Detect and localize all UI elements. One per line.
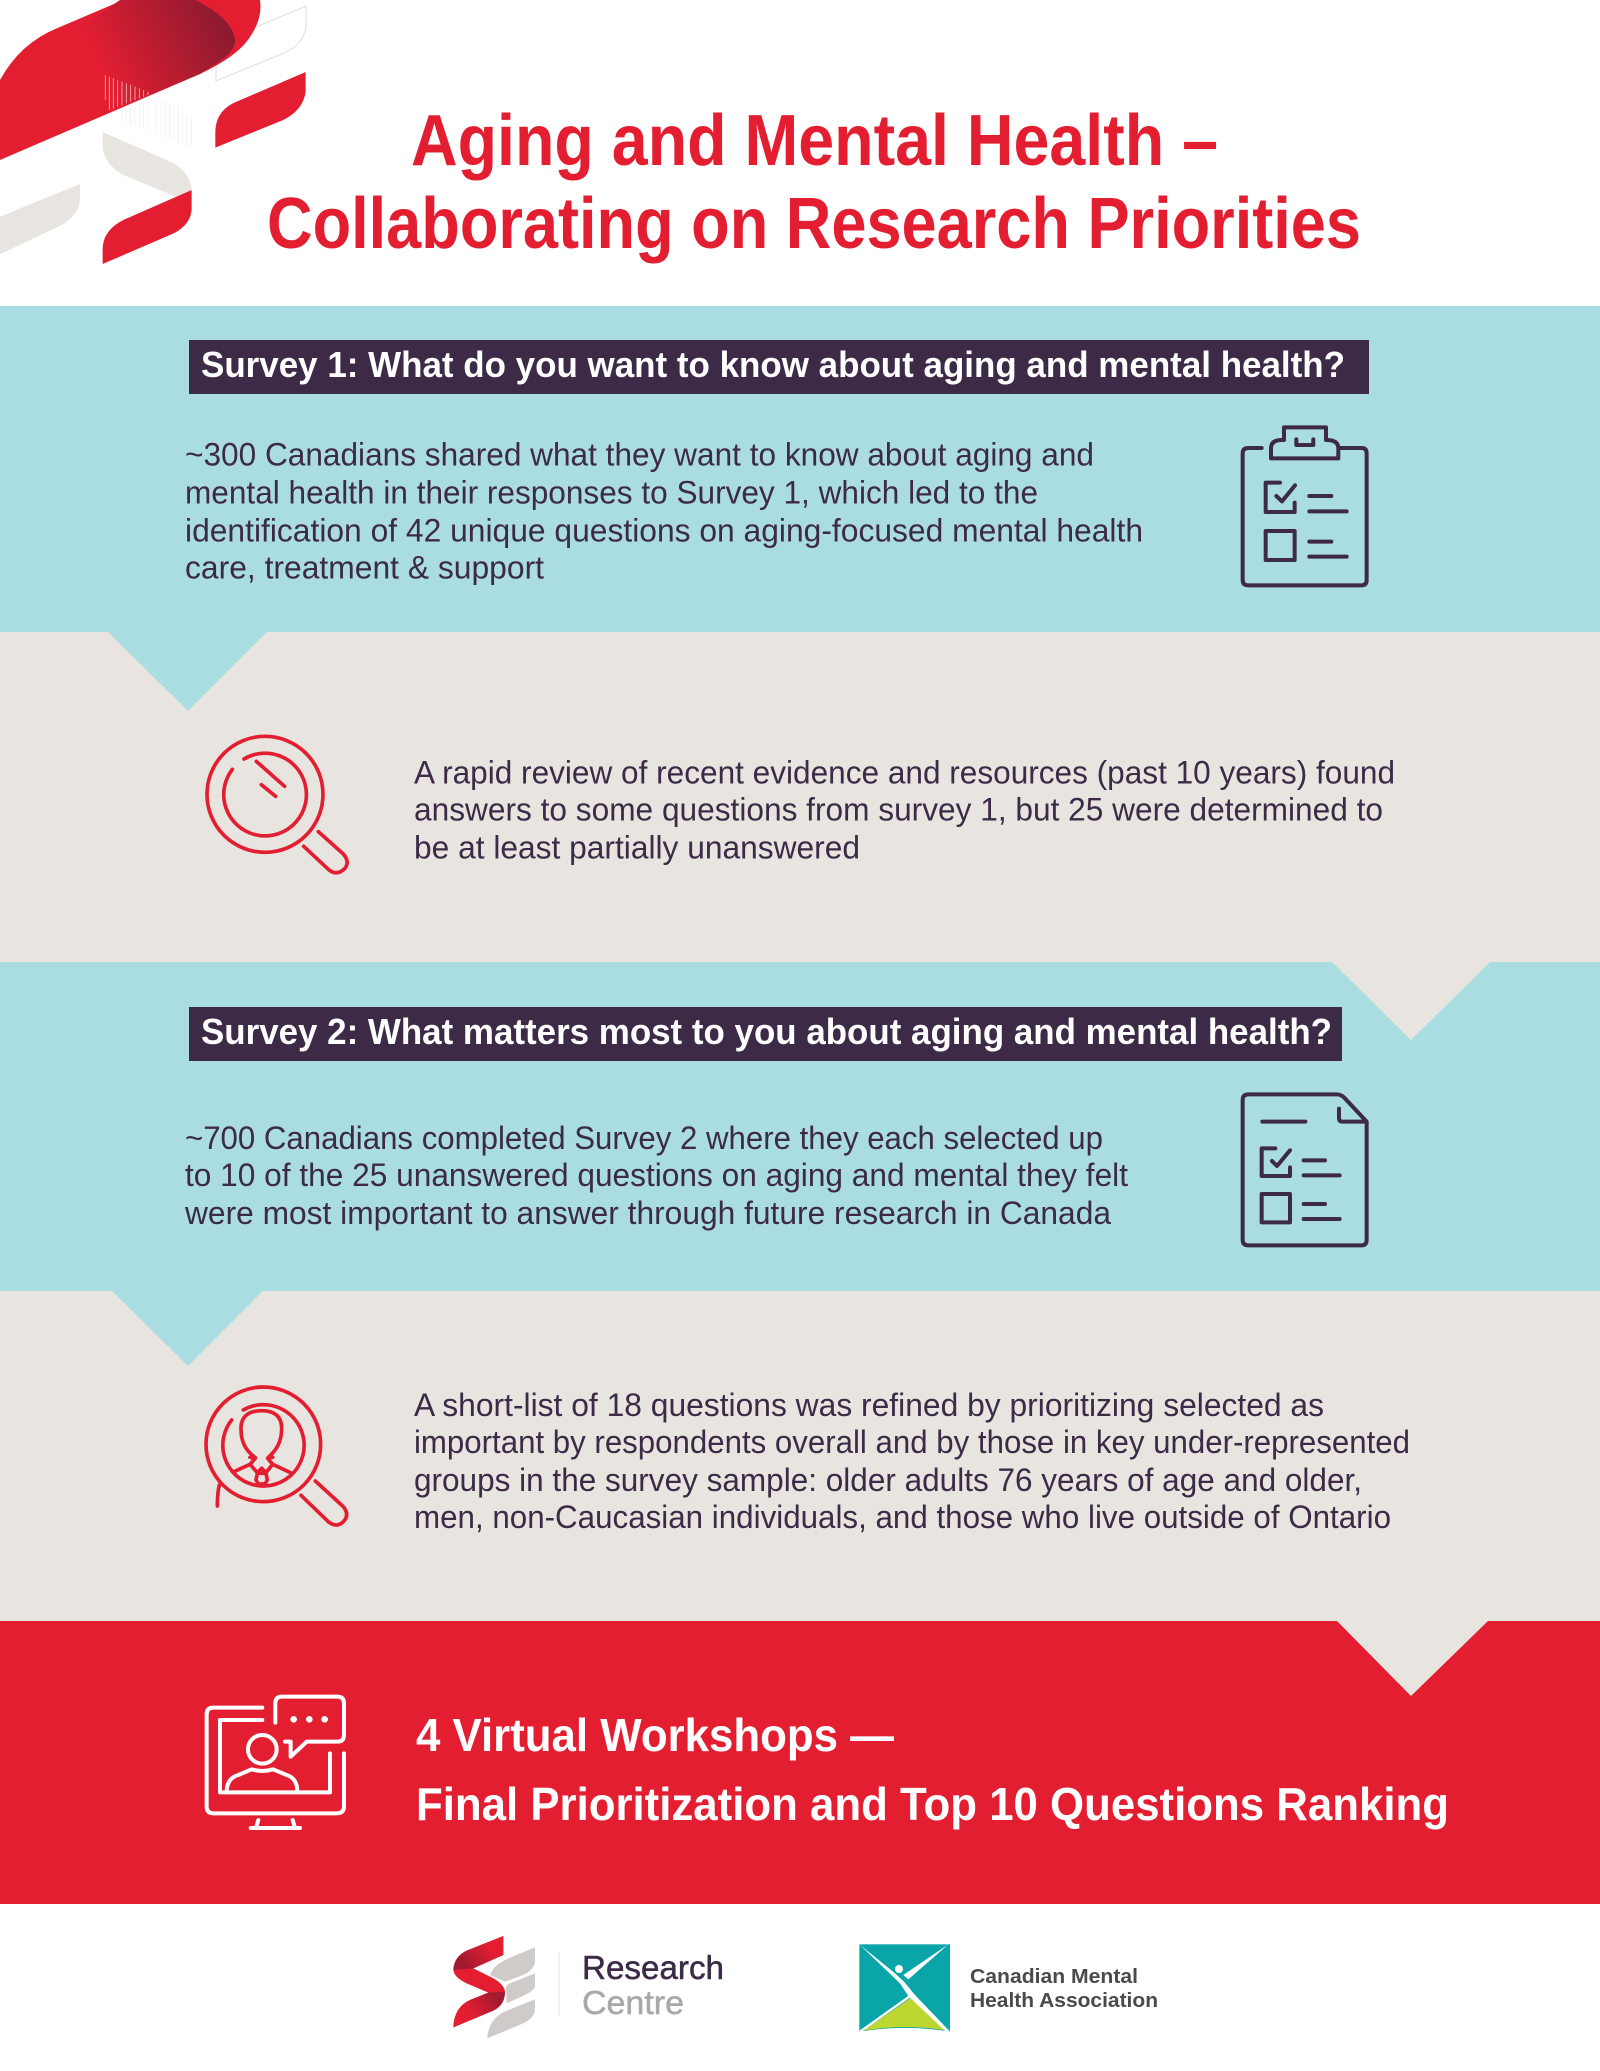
title: Collaborating on Research Priorities	[267, 184, 1361, 264]
icon: magnifier	[207, 736, 347, 873]
text: survey 2: to 10 of the 25 unanswered questions on aging and mental they felt	[185, 1157, 1128, 1193]
text: rapid review	[414, 754, 1395, 866]
text: rapid review: answers to some questions from survey 1, but 25 were determined to	[414, 792, 1383, 828]
decorative ribbon graphic	[0, 0, 306, 264]
text: survey 2: ~700 Canadians completed Survey 2 where they each selected up	[185, 1120, 1103, 1156]
icon: monitor with video call	[207, 1697, 344, 1828]
heading: survey 1: Survey 1: What do you want to know about aging and mental health?	[201, 344, 1345, 385]
panel: survey 1	[0, 306, 1600, 711]
panel: final workshops	[0, 1621, 1600, 1904]
workshops text: 4 Virtual Workshops —	[416, 1709, 894, 1761]
text: survey 1: care, treatment & support	[185, 550, 544, 586]
logo: Canadian Mental Health Association: Health Association	[970, 1990, 1158, 2012]
text: survey 2	[184, 1120, 1128, 1231]
text: short-list	[414, 1387, 1410, 1535]
text: rapid review: be at least partially unanswered	[414, 830, 860, 866]
text: survey 1	[185, 436, 1143, 586]
icon: magnifier with person	[206, 1387, 347, 1525]
text: survey 1: identification of 42 unique questions on aging-focused mental health	[185, 512, 1143, 548]
title	[267, 101, 1361, 264]
text: short-list: important by respondents overall and by those in key under-represented	[414, 1424, 1410, 1460]
title: Aging and Mental Health –	[411, 101, 1218, 181]
icon: clipboard checklist	[1243, 427, 1367, 585]
heading: survey 2: Survey 2: What matters most to you about aging and mental health?	[201, 1011, 1332, 1052]
text: survey 2: were most important to answer through future research in Canada	[184, 1195, 1111, 1231]
text: short-list: groups in the survey sample: older adults 76 years of age and older,	[414, 1462, 1362, 1498]
logo: Canadian Mental Health Association: Canadian Mental	[970, 1966, 1138, 1988]
logo: Canadian Mental Health Association	[859, 1944, 1158, 2035]
panel: survey 2	[0, 962, 1600, 1366]
workshops text: Final Prioritization and Top 10 Questions Ranking	[416, 1778, 1449, 1830]
text: survey 1: ~300 Canadians shared what they want to know about aging and	[185, 436, 1094, 472]
logo: Research Centre	[453, 1936, 724, 2038]
logo: Research Centre: Research	[582, 1949, 724, 1986]
text: short-list: men, non-Caucasian individuals, and those who live outside of Ontario	[414, 1499, 1391, 1535]
panel: rapid review	[0, 632, 1600, 1040]
text: survey 1: mental health in their responses to Survey 1, which led to the	[185, 474, 1038, 510]
text: rapid review: A rapid review of recent evidence and resources (past 10 years) found	[414, 754, 1395, 790]
text: short-list: A short-list of 18 questions was refined by prioritizing selected as	[414, 1387, 1324, 1423]
panel: short-list	[0, 1291, 1600, 1696]
icon: document checklist	[1243, 1094, 1367, 1245]
workshops text	[416, 1709, 1449, 1830]
logo: Research Centre: Centre	[582, 1984, 684, 2021]
